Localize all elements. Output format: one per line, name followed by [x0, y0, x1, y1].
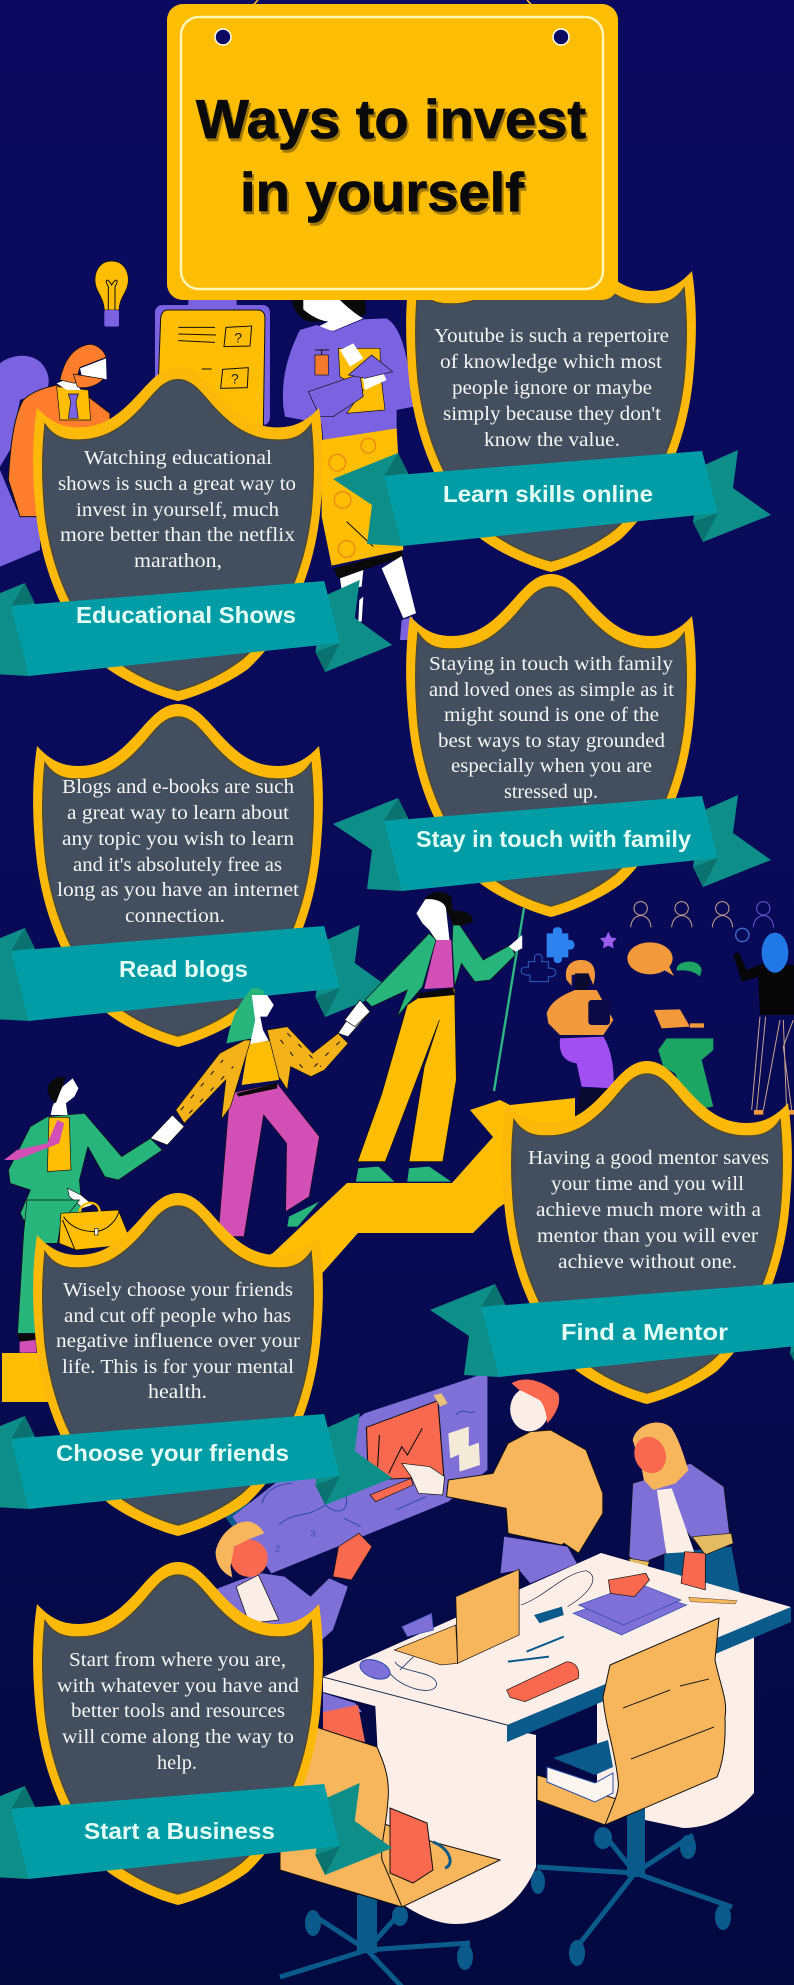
- illustration: left chair: [280, 1725, 500, 1985]
- body text: Youtube is such a repertoire: [434, 325, 669, 347]
- icon: sign hole left: [215, 29, 231, 45]
- body text: simply because they don't: [443, 403, 661, 425]
- title sign: [167, 0, 618, 300]
- illustration: woman in hijab: [629, 1422, 741, 1597]
- body text: [528, 1147, 769, 1273]
- shield: stay in touch with family: [406, 574, 696, 917]
- illustration: woman with pole: [345, 892, 522, 1182]
- illustration: man in green suit: [4, 1077, 184, 1220]
- body text: best ways to stay grounded: [438, 730, 665, 752]
- body text: of knowledge which most: [440, 351, 662, 373]
- banner: learn skills online: Learn skills online: [443, 481, 653, 507]
- illustration: blonde person: [214, 1522, 372, 1640]
- body text: shows is such a great way to: [58, 473, 296, 495]
- shield: choose your friends: [33, 1193, 323, 1536]
- body text: will come along the way to: [62, 1726, 294, 1748]
- body text: [434, 325, 669, 451]
- illustration: presentation board: 2: [275, 1544, 280, 1554]
- body text: marathon,: [134, 550, 222, 572]
- body text: stressed up.: [504, 781, 598, 803]
- icon: puzzle pieces: [521, 927, 575, 982]
- body text: Watching educational: [84, 447, 272, 469]
- illustration: man legs and briefcase: [18, 1200, 128, 1353]
- body text: people ignore or maybe: [452, 377, 652, 399]
- title text: Ways to invest: [196, 88, 586, 150]
- body text: any topic you wish to learn: [62, 828, 294, 850]
- banner: read blogs: Read blogs: [119, 956, 248, 982]
- banner: read blogs: [0, 925, 392, 1021]
- icon: star: [600, 932, 617, 948]
- banner: educational shows: [0, 580, 392, 676]
- illustration: man in orange sweater: [370, 1379, 603, 1583]
- body text: your time and you will: [551, 1173, 744, 1195]
- body text: more better than the netflix: [60, 524, 295, 546]
- body text: invest in yourself, much: [76, 499, 279, 521]
- illustration: bulb and clipboard: [95, 261, 270, 427]
- desk items: [394, 1552, 737, 1665]
- body text: [58, 447, 296, 572]
- shield: educational shows: [33, 367, 323, 701]
- desk top: [507, 1607, 791, 1742]
- illustration: desk: [323, 1552, 791, 1924]
- body text: and cut off people who has: [64, 1305, 291, 1327]
- illustration: woman with book: [283, 300, 416, 640]
- shield: start a business: [33, 1562, 323, 1905]
- body text: health.: [148, 1381, 207, 1403]
- body text: [57, 1649, 299, 1774]
- banner: choose your friends: [0, 1413, 392, 1509]
- body text: help.: [157, 1752, 197, 1774]
- man with laptop: [654, 962, 713, 1110]
- banner: learn skills online: [333, 450, 771, 546]
- body text: life. This is for your mental: [62, 1356, 294, 1378]
- standing woman: [733, 933, 794, 1115]
- illustration: presentation board: 3.: [311, 1529, 318, 1539]
- body text: a great way to learn about: [67, 802, 289, 824]
- body text: negative influence over your: [56, 1330, 300, 1352]
- body text: connection.: [125, 905, 225, 927]
- illustration: bulb and clipboard: ?: [234, 330, 242, 346]
- body text: might sound is one of the: [444, 704, 659, 726]
- stair arrow: [2, 1098, 575, 1402]
- shield: learn skills online: [406, 229, 696, 572]
- body text: Wisely choose your friends: [63, 1279, 293, 1301]
- illustration: meeting group: [521, 902, 794, 1117]
- illustration: woman with green hair, head: [226, 988, 274, 1044]
- illustration: right chair: [531, 1618, 732, 1966]
- body text: achieve without one.: [558, 1251, 737, 1273]
- illustration: presentation board: [225, 1370, 487, 1573]
- body text: better tools and resources: [71, 1700, 285, 1722]
- illustration: bulb and clipboard: ?: [231, 370, 239, 386]
- body text: Staying in touch with family: [429, 653, 674, 675]
- banner: stay in touch with family: Stay in touch with family: [416, 826, 691, 852]
- body text: Blogs and e-books are such: [62, 776, 294, 798]
- icon: sign hole right: [553, 29, 569, 45]
- body text: know the value.: [484, 429, 620, 451]
- icon: avatars: [631, 902, 774, 927]
- illustration: woman with green hair, body: [176, 1003, 370, 1237]
- banner: stay in touch with family: [333, 795, 771, 891]
- body text: and it's absolutely free as: [73, 854, 282, 876]
- icon: speech bubble: [627, 942, 674, 976]
- banner: choose your friends: Choose your friends: [56, 1440, 289, 1466]
- illustration: woman's pole: [494, 908, 524, 1091]
- shield: find a mentor: [502, 1061, 792, 1404]
- woman in orange: [547, 960, 614, 1117]
- body text: [57, 776, 299, 927]
- body text: and loved ones as simple as it: [429, 679, 674, 701]
- body text: long as you have an internet: [57, 879, 299, 901]
- body text: [56, 1279, 300, 1403]
- body text: especially when you are: [451, 755, 652, 777]
- banner: start a business: [0, 1783, 392, 1879]
- title text: in yourself: [240, 161, 525, 223]
- body text: achieve much more with a: [536, 1199, 761, 1221]
- shield: read blogs: [33, 704, 323, 1047]
- banner: educational shows: Educational Shows: [76, 602, 296, 628]
- title text: [196, 88, 586, 223]
- desk legs: [375, 1620, 754, 1924]
- body text: [429, 653, 674, 803]
- body text: with whatever you have and: [57, 1675, 299, 1697]
- body text: Having a good mentor saves: [528, 1147, 769, 1169]
- banner: find a mentor: [430, 1281, 794, 1377]
- banner: find a mentor: Find a Mentor: [561, 1319, 728, 1345]
- body text: mentor than you will ever: [537, 1225, 758, 1247]
- banner: start a business: Start a Business: [84, 1818, 275, 1844]
- body text: Start from where you are,: [69, 1649, 286, 1671]
- illustration: seated man: [0, 344, 110, 567]
